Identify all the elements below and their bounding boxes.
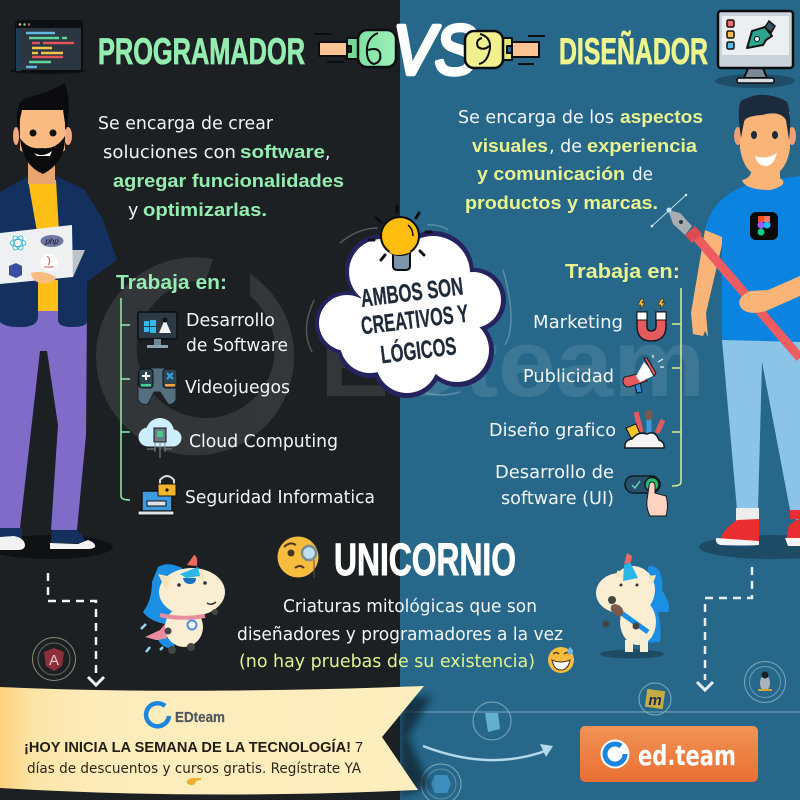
banner headline: días de descuentos y cursos gratis. Regístrate YA (27, 761, 361, 777)
icon: light bulb (369, 206, 431, 270)
programmer shirt (28, 180, 59, 311)
list: desarrollo de software ui (495, 463, 614, 509)
list: publicidad: Publicidad (523, 367, 614, 387)
list: seguridad informatica: Seguridad Informatica (185, 488, 375, 508)
designer shoes (716, 508, 800, 546)
character: designer (651, 95, 800, 559)
designer neck and face (734, 95, 796, 190)
title: diseñador: DISEÑADOR (559, 30, 708, 72)
banner ribbon (0, 686, 424, 795)
designer right arm and hand (739, 276, 800, 313)
text: designer description: y comunicación (477, 163, 625, 184)
icon: cloud chip (138, 418, 182, 458)
illustration: flying unicorn (141, 555, 225, 654)
list: diseño grafico: Diseño grafico (489, 421, 616, 441)
edteam logo: EDteam (175, 710, 225, 726)
icon: yellow fist (465, 31, 545, 68)
icon: gamepad (138, 368, 177, 404)
badge: miro: m (648, 692, 662, 709)
designer trousers (722, 340, 800, 525)
halo arcs around cloud (306, 225, 511, 395)
text: unicorn description: Criaturas mitológicas que son (283, 597, 537, 617)
bracket right (672, 288, 681, 486)
list: videojuegos: Videojuegos (185, 378, 290, 398)
banner headline: 7 (355, 740, 363, 756)
text: unicorn description: (no hay pruebas de su existencia) (239, 652, 535, 672)
designer shirt (705, 176, 800, 342)
dashed arrow left (48, 573, 104, 685)
badge: xamarin (421, 764, 461, 800)
cloud callout (315, 231, 506, 398)
text: designer description: Se encarga de los (458, 108, 614, 128)
watermark: EDteam (96, 257, 705, 455)
illustration: painter unicorn (596, 553, 669, 658)
curved arrow (423, 744, 553, 760)
programmer shoes (0, 528, 95, 550)
vs lettering: VS (393, 11, 477, 89)
text: designer description: , de (549, 137, 582, 157)
icon: software monitor (138, 312, 177, 348)
horizontal divider (400, 711, 800, 713)
icon: code window (10, 21, 86, 74)
icon: design monitor (715, 11, 795, 88)
icon: pointing hand (187, 778, 201, 785)
badge: miro (639, 683, 671, 715)
character: programmer (0, 83, 117, 559)
title: programador: PROGRAMADOR (98, 31, 305, 72)
cloud text: LÓGICOS (379, 330, 458, 369)
icon: art supplies (625, 410, 664, 448)
text: programmer description: , (325, 143, 331, 163)
text: programmer description: Se encarga de crear (98, 114, 274, 134)
cloud text: CREATIVOS Y (359, 300, 470, 340)
icon: magnet (637, 299, 666, 341)
icon: monocle emoji (278, 536, 318, 578)
watermark: EDteam: EDteam (320, 310, 705, 417)
button: ed.team: ed.team (638, 739, 736, 772)
text: unicorn description (237, 597, 563, 672)
list: desarrollo de software ui: Desarrollo de (495, 463, 614, 483)
bracket left (121, 298, 130, 500)
text: designer description: de (632, 165, 653, 185)
list: desarrollo de software: Desarrollo (186, 311, 275, 331)
text: programmer description: y (128, 201, 138, 221)
badge: go (473, 702, 511, 740)
text: designer description: visuales (472, 135, 548, 156)
heading: trabaja en left: Trabaja en: (116, 272, 227, 294)
list: desarrollo de software (186, 311, 288, 356)
designer left arm (691, 230, 724, 337)
edteam logo (146, 703, 225, 726)
text: designer description (458, 106, 703, 213)
programmer neck and face (13, 83, 72, 184)
text: programmer description: optimizarlas. (143, 199, 267, 220)
heading: unicornio: UNICORNIO (334, 534, 516, 585)
text: programmer description: software (240, 141, 325, 162)
promo banner (0, 686, 432, 797)
icon: sweat smile emoji (548, 647, 574, 673)
icon: toggle and hand (625, 476, 668, 516)
badge: linux (744, 662, 786, 702)
list: desarrollo de software: de Software (186, 336, 288, 356)
text: programmer description: soluciones con (103, 143, 236, 163)
designer pen tool (651, 194, 800, 358)
text: programmer description (98, 114, 344, 221)
icon: secure laptop (138, 476, 176, 515)
icon: green fist (314, 30, 396, 67)
heading: trabaja en right: Trabaja en: (565, 261, 680, 283)
badge: angular: A (49, 652, 59, 669)
programmer trousers (0, 308, 87, 530)
programmer laptop (0, 225, 85, 284)
text: designer description: aspectos (620, 106, 703, 127)
banner shadow (400, 696, 432, 797)
banner headline (24, 739, 363, 777)
list: cloud computing: Cloud Computing (189, 432, 338, 452)
text: programmer description: agregar funcionalidades (113, 170, 344, 191)
shadow under programmer (0, 535, 113, 559)
text: designer description: productos y marcas. (465, 192, 658, 213)
banner headline: ¡HOY INICIA LA SEMANA DE LA TECNOLOGÍA! (24, 739, 351, 756)
button: ed.team (580, 726, 758, 782)
cloud text (356, 272, 474, 371)
badge: angular (32, 638, 76, 680)
programmer laptop: php (44, 237, 59, 246)
cloud text: AMBOS SON (359, 272, 465, 313)
icon: figma badge (750, 212, 778, 240)
list: marketing: Marketing (533, 313, 623, 333)
list: desarrollo de software ui: software (UI) (501, 489, 614, 509)
icon: megaphone (623, 355, 664, 393)
text: designer description: experiencia (587, 135, 698, 156)
dashed arrow right (697, 567, 752, 690)
shadow under designer (699, 535, 800, 559)
text: unicorn description: diseñadores y programadores a la vez (237, 625, 563, 645)
programmer jacket (0, 176, 117, 327)
